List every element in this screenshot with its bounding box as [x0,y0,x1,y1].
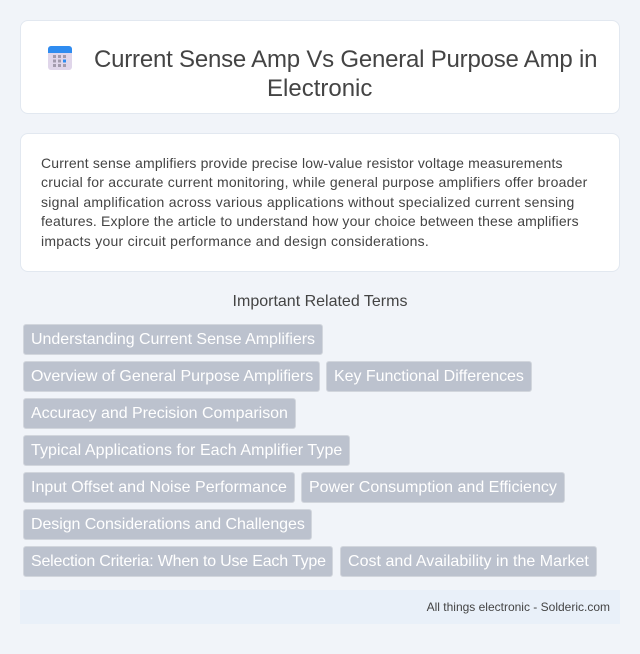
tag: cost [340,546,597,577]
tag: offset [23,472,295,503]
tag: accuracy [23,398,296,429]
tag: applications [23,435,350,466]
icon: calendar [48,46,72,70]
title: Current Sense Amp Vs General Purpose Amp in [94,46,597,73]
tag: overview: Overview of General Purpose Amplifiers [31,368,313,385]
summary text: Current sense amplifiers provide precise low-value resistor voltage measurements [41,155,563,171]
summary text: crucial for accurate current monitoring, while general purpose amplifiers offer broader [41,174,587,190]
tag: understanding [23,324,323,355]
tag: differences: Key Functional Differences [334,368,524,385]
title: Electronic [267,75,372,102]
summary text: impacts your circuit performance and design considerations. [41,233,429,249]
tag: overview [23,361,320,392]
heading: related terms: Important Related Terms [233,293,407,310]
header panel [20,20,620,114]
tag: design: Design Considerations and Challenges [31,516,305,533]
footer: All things electronic - Solderic.com [427,600,610,614]
tag: design [23,509,312,540]
tag list [23,324,597,577]
tag: power: Power Consumption and Efficiency [309,479,557,496]
tag: accuracy: Accuracy and Precision Comparison [31,405,288,422]
tag: power [301,472,565,503]
tag: selection: Selection Criteria: When to Use Each Type [31,553,326,570]
summary text: features. Explore the article to understand how your choice between these amplifiers [41,213,579,229]
tag: differences [326,361,532,392]
tag: selection [23,546,333,577]
tag: applications: Typical Applications for Each Amplifier Type [31,442,342,459]
panel: summary [20,133,620,272]
title [94,46,597,102]
tag: cost: Cost and Availability in the Market [348,553,589,570]
summary text: signal amplification across various applications without specialized current sensing [41,194,575,210]
footer [20,590,620,624]
tag: understanding: Understanding Current Sense Amplifiers [31,331,315,348]
summary text [41,155,588,249]
tag: offset: Input Offset and Noise Performance [31,479,287,496]
